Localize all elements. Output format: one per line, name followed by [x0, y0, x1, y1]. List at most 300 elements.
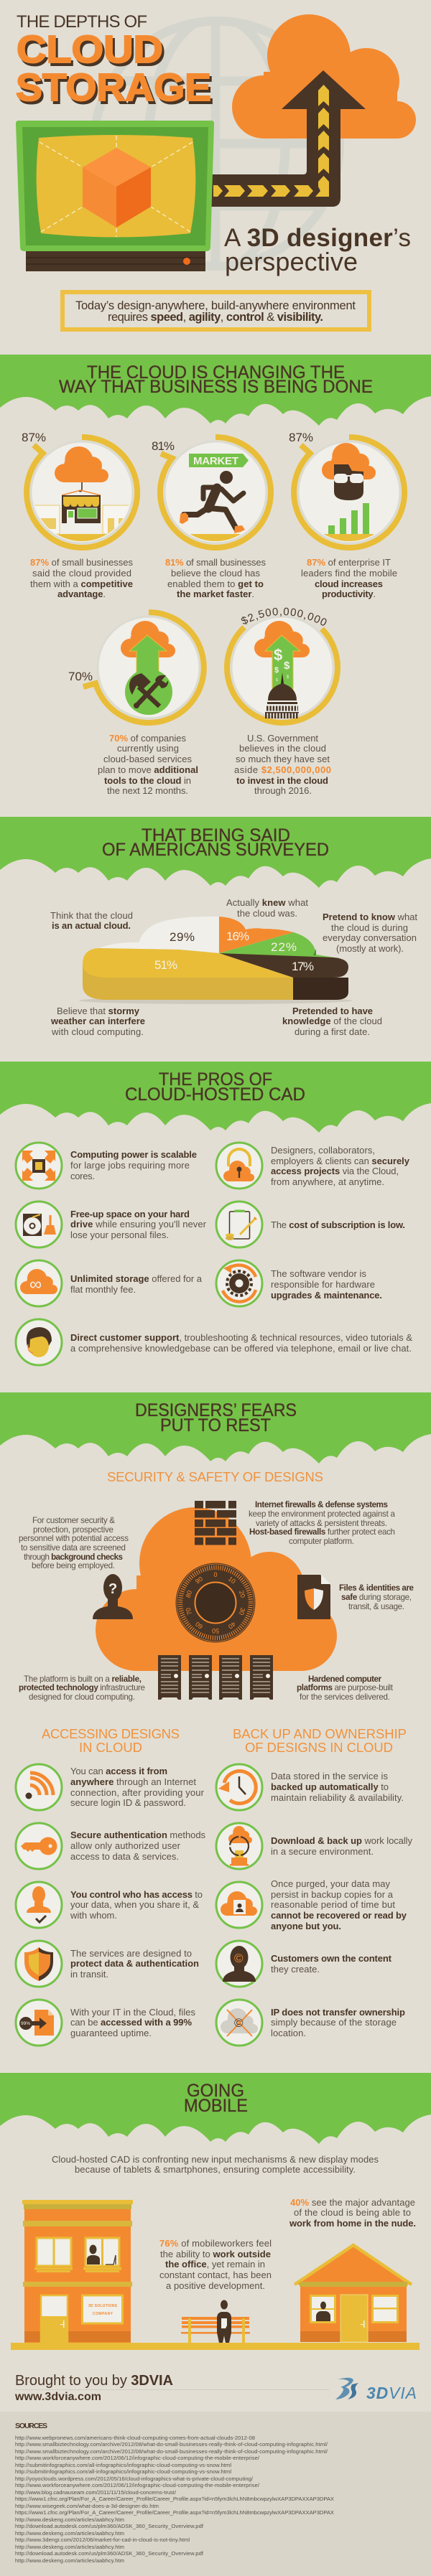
text — [271, 2007, 405, 2038]
icon: safe dial: 20 — [238, 1590, 246, 1598]
panel: security cloud — [19, 1500, 414, 1702]
text: firewalls: computer platform. — [289, 1537, 354, 1546]
text: can be accessed with a 99% — [70, 2017, 192, 2028]
section banner: going mobile: MOBILE — [184, 2096, 248, 2116]
source list: http://www.3dengr.com/2012/06/market-for-cad-in-cloud-is-not-tiny.html — [15, 2537, 190, 2543]
text: employers & clients can securely — [271, 1156, 410, 1166]
icon: IT leader and bars — [322, 443, 376, 541]
item: direct customer support — [27, 1327, 412, 1357]
title: cloud storage: STORAGE — [18, 69, 213, 112]
stat labels: 29% — [170, 930, 195, 944]
text — [271, 1878, 407, 1931]
text: 76% mobile workers: a positive development. — [166, 2280, 265, 2291]
text: background checks — [19, 1516, 129, 1570]
credits: brought to you by: Brought to you by 3DVIA — [15, 2373, 173, 2389]
text: location. — [271, 2028, 306, 2038]
icon: capitol with dollars: $ — [274, 646, 282, 664]
title: cloud storage: CLOUD — [19, 31, 165, 74]
text — [271, 1145, 410, 1187]
text: 87% enterprise IT: cloud increases — [315, 579, 383, 589]
icon: capitol with dollars: $ — [276, 678, 278, 683]
text: 87% small businesses: them with a competitive — [30, 579, 133, 589]
source list: https://www1.cfnc.org/Plan/For_A_Career/Career_Profile/Career_Profile.aspx?id=n5fym3lchLhN8mbcwpzylwXAP3DPAXXAP3DPAX — [15, 2496, 334, 2502]
icon: RSS signal — [26, 1773, 53, 1799]
chart labels: Believe that stormy — [57, 1006, 140, 1016]
ring gauge — [27, 437, 137, 548]
background globe — [86, 14, 345, 273]
icon: monitor with 3D cube — [16, 121, 214, 271]
text: 87% enterprise IT: 87% of enterprise IT — [307, 557, 391, 568]
text: Customers own the content — [271, 1953, 392, 1964]
text: 87% small businesses — [30, 557, 134, 599]
icon: crossed copyright cloud — [221, 2008, 258, 2036]
section banner: the cloud is changing — [0, 355, 431, 426]
title: the depths of: THE DEPTHS OF — [17, 12, 147, 32]
icon: cloud padlock — [223, 1149, 254, 1181]
icon: safe dial: 50 — [212, 1627, 219, 1634]
heading: back up and ownership: BACK UP AND OWNERSHIP — [233, 1726, 407, 1741]
chart labels: the cloud is during — [331, 922, 408, 933]
icon: capitol with dollars: $ — [284, 660, 290, 672]
text: hardened platforms: Hardened computer — [308, 1675, 381, 1684]
text: anyone but you. — [271, 1921, 341, 1931]
text: files and identities: transit, & usage. — [348, 1602, 404, 1611]
text: 70% of companies: 70% of companies — [109, 733, 187, 744]
section banner: the cloud is changing: THE CLOUD IS CHANGING THE — [87, 362, 345, 383]
text: The services are designed to — [70, 1948, 192, 1959]
text: 87% small businesses: advantage. — [57, 589, 106, 599]
text: Direct customer support, troubleshooting & technical resources, video tutorials & — [70, 1332, 412, 1343]
logo: 3DVIA: 3DVIA — [366, 2384, 417, 2402]
section banner: designers' fears — [0, 1392, 431, 1463]
panel: sources — [0, 2412, 431, 2576]
text: Once purged, your data may — [271, 1878, 391, 1889]
text — [70, 1766, 205, 1808]
icon: office building: 3D SOLUTIONS — [88, 2304, 118, 2308]
text: simply because of the storage — [271, 2017, 397, 2028]
text — [70, 1830, 205, 1862]
source list: https://www1.cfnc.org/Plan/For_A_Career/Career_Profile/Career_Profile.aspx?id=n5fym3lchLhN8mbcwpzylwXAP3DPAXXAP3DPAX — [15, 2509, 334, 2516]
credits: brought to you by — [14, 2373, 329, 2403]
stat labels: 51% — [154, 958, 177, 972]
text: reasonable period of time but — [271, 1899, 395, 1910]
text: responsible for hardware — [271, 1279, 375, 1290]
text: access projects via the Cloud, — [271, 1166, 399, 1176]
heading: back up and ownership: OF DESIGNS IN CLOUD — [245, 1740, 393, 1755]
text: secure login ID & password. — [70, 1797, 186, 1808]
panel: 81% market faster — [152, 437, 271, 599]
text: You control who has access to — [70, 1889, 203, 1900]
chart labels: the cloud was. — [237, 908, 297, 919]
text: flat monthly fee. — [70, 1284, 136, 1295]
stat: 87%: 87% — [22, 431, 46, 444]
panel: 70% additional tools — [68, 612, 204, 796]
text: protect data & authentication — [70, 1958, 199, 1969]
ring gauge — [83, 612, 204, 723]
source list — [15, 2435, 334, 2564]
text: US government: aside $2,500,000,000 — [234, 764, 331, 775]
source list: http://www.deskeng.com/articles/aabhcy.htm — [15, 2516, 124, 2523]
chart labels: Actually knew what — [226, 897, 308, 908]
icon: cloud with document — [221, 1891, 257, 1916]
text: 81% small businesses: believe the cloud has — [171, 568, 260, 579]
heading: accessing designs in cloud: IN CLOUD — [79, 1740, 142, 1755]
icon: sync between cloud and workstation — [228, 1826, 252, 1866]
source list: http://download.autodesk.com/us/plm360/ADSK_360_Security_Overview.pdf — [15, 2550, 204, 2557]
text — [70, 1149, 197, 1181]
text: 40% work from home: 40% see the major advantage — [290, 2197, 415, 2208]
text: platform — [19, 1675, 145, 1702]
text: lose your personal files. — [70, 1230, 169, 1240]
chart labels: weather can interfere — [50, 1016, 145, 1026]
text: 70% of companies: plan to move additional — [98, 764, 198, 775]
text: 87% small businesses: said the cloud provided — [32, 568, 131, 579]
text: hardened platforms: platforms are purpose-built — [297, 1683, 394, 1692]
text: cannot be recovered or read by — [271, 1910, 407, 1921]
icon: safe dial — [175, 1563, 256, 1642]
text: Designers, collaborators, — [271, 1145, 375, 1156]
chart labels: is an actual cloud. — [52, 920, 131, 931]
icon: expanding chip — [22, 1151, 55, 1181]
stat: 87%: 87% — [289, 431, 313, 444]
ring gauge — [227, 617, 338, 723]
text: 70% of companies: cloud-based services — [103, 754, 193, 764]
source list: http://www.workforceanywhere.com/2012/06/12/infographic-cloud-computing-the-mobile-enterprise/ — [15, 2482, 260, 2488]
icon: infinity cloud: ∞ — [29, 1275, 42, 1294]
text: 87% enterprise IT: leaders find the mobile — [301, 568, 397, 579]
text: access to data & services. — [70, 1851, 179, 1862]
item: secure access — [223, 1145, 410, 1187]
icon: questioned person — [93, 1574, 133, 1619]
icon: gear with arrows — [223, 1265, 256, 1302]
stat labels: 16% — [226, 929, 249, 943]
title: cloud storage — [16, 28, 213, 112]
text: US government: U.S. Government — [247, 733, 318, 744]
text: Unlimited storage offered for a — [70, 1273, 203, 1284]
text: they create. — [271, 1964, 320, 1975]
panel: $2.5 billion government — [224, 607, 340, 796]
text: background checks: personnel with potential access — [19, 1534, 129, 1543]
heading: security and safety: SECURITY & SAFETY OF DESIGNS — [107, 1469, 323, 1484]
chart labels: knowledge of the cloud — [282, 1016, 382, 1026]
text: US government: to invest in the cloud — [236, 775, 328, 786]
icon: person with copyright: © — [234, 1952, 244, 1965]
chart labels: Pretended to have — [292, 1006, 373, 1016]
text: Secure authentication methods — [70, 1830, 205, 1840]
icon ring group: designs in cloud — [16, 1764, 262, 2046]
source list: http://www.deskeng.com/articles/aabhcy.htm — [15, 2544, 124, 2550]
item: secure authentication — [21, 1830, 205, 1862]
section banner: that being said: OF AMERICANS SURVEYED — [102, 840, 329, 860]
text: in a secure environment. — [271, 1846, 374, 1857]
section banner: designers' fears: PUT TO REST — [160, 1415, 271, 1435]
stat labels: 17% — [292, 960, 314, 973]
text — [271, 1268, 382, 1301]
text: hardened platforms: for the services delivered. — [300, 1692, 390, 1702]
icon: infinity cloud — [20, 1269, 57, 1294]
callout: design-anywhere box: requires speed, agility, control & visibility. — [108, 311, 323, 324]
icon: key — [21, 1837, 57, 1855]
ground — [11, 2343, 420, 2350]
text: 81% small businesses: 81% of small businesses — [165, 557, 266, 568]
text: platform: designed for cloud computing. — [29, 1692, 135, 1702]
text: firewalls: Host-based firewalls further protect each — [249, 1527, 395, 1537]
subtitle: a 3D designer's perspective — [224, 224, 411, 276]
text: platform: The platform is built on a reliable, — [24, 1675, 142, 1684]
icon: runner to market: MARKET — [193, 455, 238, 467]
icon: large cloud — [232, 14, 416, 139]
text: 81% small businesses: enabled them to get to — [167, 579, 264, 589]
text: The cost of subscription is low. — [271, 1219, 405, 1230]
text: US government: so much they have set — [236, 754, 330, 764]
icon: 99% file: 99% — [21, 2021, 30, 2026]
source list: http://www.deskeng.com/articles/aabhcy.htm — [15, 2557, 124, 2564]
source list: http://submitinfographics.com/all-infographics/infographic-cloud-computing-vs-snow.html — [15, 2468, 231, 2475]
text: The software vendor is — [271, 1268, 366, 1279]
text: 40% work from home — [289, 2197, 416, 2229]
text: firewalls — [249, 1500, 396, 1546]
title: cloud storage: STORAGE — [16, 66, 211, 109]
text: with whom. — [70, 1910, 117, 1921]
chart labels: during a first date. — [295, 1026, 370, 1037]
icon: office building — [22, 2200, 133, 2343]
section banner: the pros of cloud-hosted CAD — [0, 1062, 431, 1133]
text: 76% mobile workers: constant contact, has been — [159, 2270, 272, 2280]
icon: safe dial: 40 — [227, 1621, 237, 1631]
text — [271, 1835, 412, 1857]
icon ring group: pros — [16, 1143, 262, 1365]
icon: capitol with dollars — [254, 621, 310, 716]
icon: capitol with dollars: $ — [287, 675, 289, 680]
text: upgrades & maintenance. — [271, 1290, 382, 1301]
subtitle: a 3D designer's perspective: A 3D designer’s — [224, 224, 411, 252]
text: 40% work from home: work from home in the nude. — [289, 2218, 416, 2229]
text: hardened platforms — [297, 1675, 394, 1702]
text: maintain reliability & availability. — [271, 1792, 404, 1803]
text: 70% of companies: tools to the cloud in — [104, 775, 191, 786]
section banner: designers' fears: DESIGNERS’ FEARS — [135, 1400, 297, 1420]
text: cores. — [70, 1171, 95, 1181]
icon: server racks — [158, 1655, 273, 1700]
header panel — [16, 12, 416, 329]
icon: file with shield — [297, 1575, 330, 1619]
text: firewalls: keep the environment protected against a — [249, 1509, 396, 1519]
icon: safe dial: 30 — [238, 1607, 246, 1616]
chart labels: (mostly at work). — [336, 943, 404, 954]
icon: safe dial: 10 — [227, 1575, 237, 1585]
text: allow only authorized user — [70, 1840, 181, 1851]
text: 76% mobile workers — [159, 2238, 272, 2291]
source list: http://www.deskeng.com/articles/aabhcy.htm — [15, 2530, 124, 2537]
text — [70, 1273, 203, 1295]
text: Free-up space on your hard — [70, 1209, 190, 1219]
source list: http://submitinfographics.com/all-infographics/infographic-cloud-computing-vs-snow.html — [15, 2462, 231, 2468]
title: cloud storage: CLOUD — [17, 28, 163, 71]
subtitle: a 3D designer's perspective: perspective — [225, 247, 358, 276]
text: You can access it from — [70, 1766, 167, 1776]
chart labels: with cloud computing. — [51, 1026, 144, 1037]
text: 76% mobile workers: the office, yet remain in — [165, 2259, 265, 2270]
chart labels: Pretend to know what — [323, 912, 417, 922]
text: anywhere through an Internet — [70, 1776, 196, 1787]
text: Computing power is scalable — [70, 1149, 197, 1160]
item: customers own content — [223, 1946, 392, 1982]
callout: design-anywhere box — [62, 292, 369, 329]
text: US government — [234, 733, 331, 796]
source list: http://www.workforceanywhere.com/2012/06/12/infographic-cloud-computing-the-mobile-enterprise/ — [15, 2455, 260, 2461]
text: background checks: For customer security & — [32, 1516, 115, 1525]
text — [70, 1889, 203, 1921]
source list: http://www.wisegeek.com/what-does-a-3d-designer-do.htm — [15, 2503, 159, 2509]
section banner: the cloud is changing: WAY THAT BUSINESS IS BEING DONE — [59, 377, 373, 397]
icon: person with check — [27, 1886, 51, 1922]
icon: clipboard, pencil, coins — [226, 1210, 256, 1240]
text: With your IT in the Cloud, files — [70, 2007, 195, 2018]
text: IP does not transfer ownership — [271, 2007, 405, 2018]
text: for large jobs requiring more — [70, 1160, 190, 1171]
stat: 70%: 70% — [68, 670, 93, 683]
text: persist in backup copies for a — [271, 1889, 394, 1900]
source list: http://www.webpronews.com/americans-think-cloud-computing-comes-from-actual-clouds-2012-08 — [15, 2435, 255, 2441]
big cloud — [96, 1507, 337, 1671]
text: 76% mobile workers: the ability to work outside — [160, 2249, 271, 2259]
chart labels: Think that the cloud — [50, 910, 133, 921]
text: firewalls: variety of attacks & persistent threats. — [256, 1519, 387, 1528]
icon: firewall — [195, 1501, 236, 1545]
arrow from monitor to cloud — [208, 70, 366, 207]
item: control access — [27, 1886, 203, 1922]
chart labels — [50, 897, 417, 1037]
icon: runner to market — [180, 454, 249, 541]
item: download and back up — [228, 1826, 412, 1866]
heading: back up and ownership — [233, 1726, 407, 1755]
text: 70% of companies: currently using — [117, 743, 179, 754]
chart: cloud-shaped 3D pie — [79, 917, 352, 1004]
text: background checks: to sensitive data are screened — [21, 1543, 126, 1552]
section banner: that being said: THAT BEING SAID — [142, 825, 290, 846]
icon: safe dial: 0 — [213, 1571, 218, 1578]
text: 87% enterprise IT — [301, 557, 397, 599]
text: a comprehensive knowledgebase can be offered via telephone, email or live chat. — [70, 1343, 412, 1354]
text: Download & back up work locally — [271, 1835, 412, 1846]
text: in transit. — [70, 1969, 108, 1980]
section banner: the pros of cloud-hosted CAD: THE PROS OF — [159, 1069, 272, 1090]
text: background checks: protection, prospective — [33, 1525, 113, 1535]
text: files and identities — [339, 1583, 414, 1611]
item: free-up space — [23, 1209, 207, 1240]
source list: http://download.autodesk.com/us/plm360/ADSK_360_Security_Overview.pdf — [15, 2523, 204, 2529]
icon: cloud arrow with tools — [121, 621, 175, 715]
text: mobile intro: because of tablets & smartphones, ensuring complete accessibility. — [75, 2164, 356, 2175]
icon: safe dial: 80 — [185, 1590, 193, 1598]
text: 87% small businesses: 87% of small businesses — [30, 557, 134, 568]
icon: person with copyright — [223, 1946, 256, 1982]
text: mobile intro — [52, 2154, 379, 2175]
icon: shop under cloud — [34, 446, 129, 541]
text: 81% small businesses — [165, 557, 266, 599]
item: access from anywhere — [26, 1766, 205, 1808]
text — [70, 1948, 199, 1980]
text: files and identities: Files & identities are — [339, 1583, 414, 1593]
panel: 87% competitive advantage — [22, 431, 137, 599]
icon: backup clock — [218, 1771, 256, 1804]
text: 70% of companies — [98, 733, 198, 796]
text: background checks: through background checks — [24, 1552, 123, 1562]
text — [271, 1953, 392, 1975]
icon: 99% file — [19, 2010, 54, 2036]
icon: capitol with dollars: $ — [274, 666, 279, 675]
text: your data, when you share it, & — [70, 1899, 199, 1910]
text: 87% enterprise IT: productivity. — [322, 589, 376, 599]
source list: http://www.blog.cadnauseam.com/2011/11/15/cloud-concerns-trust/ — [15, 2489, 177, 2496]
item: protect data — [24, 1947, 199, 1981]
ring gauge — [160, 437, 271, 548]
item: unlimited storage — [20, 1269, 203, 1295]
icon: office building: COMPANY — [93, 2312, 113, 2316]
icon: hard drive and broom — [23, 1214, 56, 1236]
text: drive while ensuring you'll never — [70, 1219, 207, 1230]
section banner: going mobile: GOING — [187, 2081, 244, 2101]
stat labels: 22% — [271, 940, 297, 954]
callout: design-anywhere box: Today’s design-anywhere, build-anywhere environment — [75, 299, 356, 312]
section banner: that being said — [0, 817, 431, 888]
text: mobile intro: Cloud-hosted CAD is confronting new input mechanisms & new display modes — [52, 2154, 379, 2165]
text — [271, 1771, 404, 1803]
stat labels — [154, 929, 314, 973]
panel: 87% productivity — [289, 431, 404, 599]
credits: brought to you by: www.3dvia.com — [14, 2391, 101, 2403]
text: 76% mobile workers: 76% of mobileworkers feel — [159, 2238, 272, 2249]
icon: safe dial: 60 — [194, 1621, 204, 1631]
source list: http://yoyoclouds.wordpress.com/2012/05/16/cloud-infographics-what-is-private-cloud-computing/ — [15, 2476, 254, 2482]
text: Data stored in the service is — [271, 1771, 388, 1781]
icon: safe dial: 90 — [194, 1575, 204, 1585]
icon: questioned person: ? — [108, 1581, 117, 1597]
text: US government: believes in the cloud — [239, 743, 326, 754]
icon: support agent — [27, 1327, 52, 1357]
stat: 81%: 81% — [152, 439, 175, 453]
heading: accessing designs in cloud — [42, 1726, 180, 1755]
icon: shield — [24, 1947, 53, 1981]
text: guaranteed uptime. — [70, 2028, 152, 2038]
text: platform: protected technology infrastructure — [19, 1683, 145, 1692]
item: scalable computing — [22, 1149, 197, 1181]
item: low cost — [226, 1210, 405, 1240]
text: US government: through 2016. — [254, 785, 312, 796]
text — [70, 1332, 412, 1354]
item: 99% uptime — [19, 2007, 195, 2038]
chart labels: everyday conversation — [323, 932, 417, 943]
text: backed up automatically to — [271, 1781, 389, 1792]
text: files and identities: safe during storage, — [341, 1593, 412, 1602]
text: 81% small businesses: the market faster. — [177, 589, 254, 599]
source list: http://www.smallbiztechnology.com/archive/2012/08/what-do-small-businesses-really-think-of-cloud-computing-infographic.html/ — [15, 2448, 328, 2455]
item: automatic backup — [218, 1771, 404, 1804]
logo: 3DVIA — [335, 2378, 417, 2402]
icon: house — [295, 2244, 412, 2342]
icon: worker on bench — [181, 2300, 250, 2343]
text: firewalls: Internet firewalls & defense systems — [255, 1500, 388, 1509]
ring gauge — [294, 437, 404, 548]
text: 40% work from home: of the cloud is being able to — [294, 2207, 411, 2218]
icon: crossed copyright cloud: © — [234, 2016, 244, 2030]
text: from anywhere, at anytime. — [271, 1176, 384, 1187]
item: data purged — [221, 1878, 407, 1931]
heading: sources: SOURCES — [15, 2422, 47, 2430]
source list: http://www.smallbiztechnology.com/archive/2012/08/what-do-small-businesses-really-think-of-cloud-computing-infographic.html/ — [15, 2441, 328, 2448]
item: vendor upgrades — [223, 1265, 382, 1302]
section banner: going mobile — [0, 2073, 431, 2144]
